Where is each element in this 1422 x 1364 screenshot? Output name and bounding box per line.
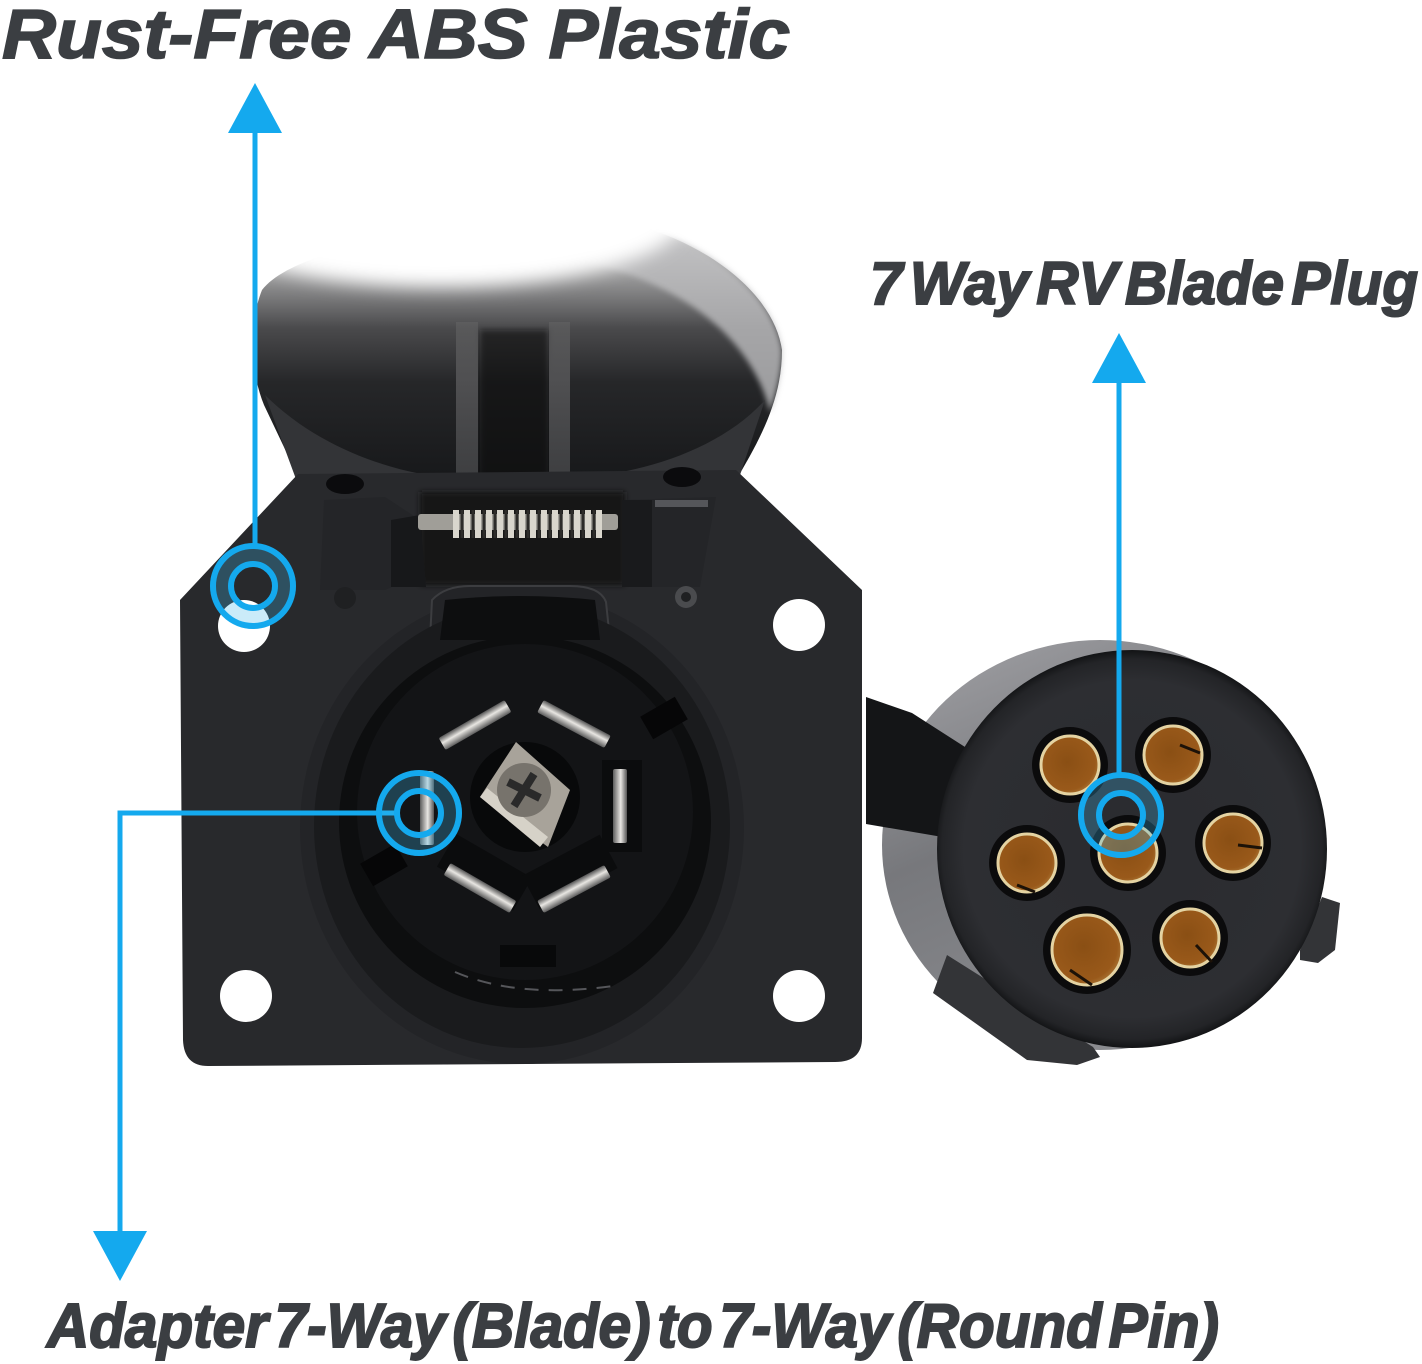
marker [379, 773, 459, 853]
product: 7-way round pin plug [866, 640, 1340, 1065]
product: 7-way blade socket [180, 143, 862, 1066]
socket blades [420, 700, 627, 913]
socket lid [195, 143, 782, 490]
heading: Adapter 7-Way (Blade) to 7-Way (Round Pin): Adapter 7-Way (Blade) to 7-Way (Round Pin) [45, 1292, 1219, 1361]
plug body [882, 640, 1318, 1050]
black ground blades [360, 697, 688, 886]
plug face [937, 650, 1327, 1048]
arrow [228, 83, 282, 546]
clip tabs [933, 897, 1340, 1065]
socket cavity [339, 636, 711, 1008]
hinge recess [420, 492, 625, 585]
bump details [334, 586, 697, 609]
key notch [500, 945, 556, 967]
callout: Adapter 7-Way [93, 773, 459, 1281]
central terminal [470, 742, 580, 852]
callout: 7 Way RV Blade Plug [1081, 333, 1161, 855]
lid screw holes [326, 467, 701, 494]
hinge spring [418, 510, 618, 538]
callout: Rust-Free ABS Plastic [213, 83, 293, 626]
marker [213, 546, 293, 626]
bottom rim scuffs [455, 972, 620, 990]
mounting plate [180, 470, 862, 1066]
socket outer ring [300, 592, 744, 1064]
brass pins [989, 717, 1271, 994]
mounting holes [218, 599, 825, 1022]
hinge blocks [320, 497, 716, 590]
blade shadows [437, 760, 642, 911]
arrow [1092, 333, 1146, 776]
marker [1081, 775, 1161, 855]
arrow [93, 813, 396, 1281]
socket collar notch [430, 586, 610, 640]
heading: 7 Way RV Blade Plug: 7 Way RV Blade Plug [870, 250, 1418, 317]
connecting cable [866, 697, 1000, 840]
